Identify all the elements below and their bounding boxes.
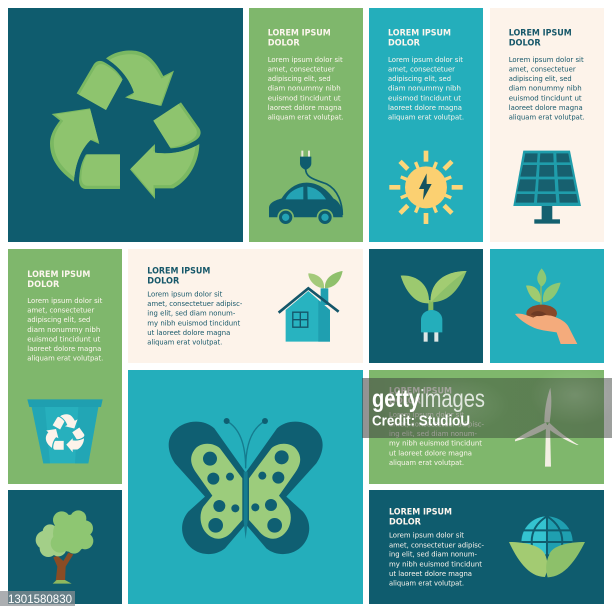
text block (147, 289, 243, 347)
heading: LOREM IPSUM (147, 266, 210, 276)
panel: plug with leaves (369, 249, 483, 363)
text block: amet, consectetuer adipisc- (389, 420, 484, 429)
text block: diam nonummy nibh (27, 325, 100, 334)
heading: LOREM IPSUM (27, 270, 90, 280)
text block: euismod tincidunt ut (509, 93, 582, 102)
panel: recycling bin (8, 249, 122, 484)
icon: electric car (269, 151, 343, 226)
panel: wind turbine (369, 370, 604, 484)
text block: Lorem ipsum dolor sit (147, 289, 222, 298)
text block: adipiscing elit, sed (27, 315, 90, 324)
text block: aliquam erat volutpat. (27, 354, 103, 363)
heading: LOREM IPSUM (268, 29, 331, 39)
heading (509, 29, 572, 49)
icon: tree (36, 510, 93, 584)
text block: laoreet dolore magna (509, 103, 583, 112)
icon: recycling bin (27, 399, 103, 463)
heading: DOLOR (389, 397, 421, 407)
heading (388, 29, 451, 49)
heading: DOLOR (389, 517, 421, 527)
text block: diam nonummy nibh (388, 84, 461, 93)
heading: LOREM IPSUM (388, 29, 451, 39)
text block: laoreet dolore magna (388, 103, 462, 112)
text block: aliquam erat volutpat. (389, 579, 464, 588)
icon: wind turbine (515, 388, 579, 467)
text block (268, 55, 344, 121)
icon: solar panel (513, 151, 581, 224)
text block (509, 55, 585, 121)
text block: ing elit, sed diam nonum- (147, 309, 236, 318)
text block (27, 296, 103, 363)
panel: eco house (128, 249, 363, 363)
text block: adipiscing elit, sed (509, 74, 572, 83)
panel: globe with leaves (369, 490, 604, 604)
text block: euismod tincidunt ut (268, 93, 341, 102)
icon: globe held by leaves (509, 516, 585, 577)
text block: euismod tincidunt ut (388, 93, 461, 102)
panel: solar panel (490, 8, 604, 242)
text block: Lorem ipsum dolor sit (27, 296, 102, 305)
text block: my nibh euismod tincidunt (389, 559, 482, 568)
panel: hand holding seedling (490, 249, 604, 363)
text block: Lorem ipsum dolor sit (388, 55, 463, 64)
heading: DOLOR (268, 39, 300, 49)
text block (388, 55, 464, 121)
text block: my nibh euismod tincidunt (147, 318, 240, 327)
text block: diam nonummy nibh (268, 84, 341, 93)
heading (27, 270, 90, 290)
heading (147, 266, 210, 286)
text block: aliquam erat volutpat. (268, 112, 344, 121)
image id tag: 1301580830 (8, 594, 72, 606)
text block: adipiscing elit, sed (388, 74, 451, 83)
text block: aliquam erat volutpat. (389, 458, 464, 467)
panel: recycling symbol (8, 8, 243, 242)
text block: ut laoreet dolore magna (389, 569, 472, 578)
icon: house with leaves (279, 271, 343, 342)
text block: amet, consectetuer adipisc- (389, 540, 484, 549)
text block: amet, consectetuer (388, 65, 455, 74)
watermark band (362, 365, 612, 438)
heading: LOREM IPSUM (509, 29, 572, 39)
text block: aliquam erat volutpat. (388, 112, 464, 121)
panel: electric car (249, 8, 363, 242)
heading: DOLOR (27, 280, 60, 290)
icon: hand with seedling (515, 268, 577, 344)
heading: DOLOR (388, 39, 420, 49)
icon: sun with lightning bolt (389, 151, 463, 224)
text block: euismod tincidunt ut (27, 334, 100, 343)
text block: ing elit, sed diam nonum- (389, 550, 477, 559)
text block: adipiscing elit, sed (268, 74, 331, 83)
panel: tree (8, 490, 122, 604)
text block: ut laoreet dolore magna (389, 448, 472, 457)
text block (389, 410, 484, 467)
text block: laoreet dolore magna (27, 344, 101, 353)
text block: diam nonummy nibh (509, 84, 582, 93)
image id tag (0, 591, 75, 606)
panel: butterfly (128, 370, 363, 604)
text block: aliquam erat volutpat. (509, 112, 585, 121)
heading: DOLOR (509, 39, 541, 49)
text block: amet, consectetuer (268, 65, 335, 74)
text block: aliquam erat volutpat. (147, 338, 222, 347)
text block: amet, consectetuer adipisc- (147, 299, 243, 308)
heading (389, 387, 452, 407)
text block: Lorem ipsum dolor sit (509, 55, 584, 64)
icon: butterfly (169, 418, 323, 554)
watermark logo: gettyimages (372, 385, 485, 413)
text block: laoreet dolore magna (268, 103, 342, 112)
text block: Lorem ipsum dolor sit (389, 410, 464, 419)
text block (389, 531, 484, 588)
heading (389, 507, 452, 527)
icon: recycling arrows (50, 51, 201, 199)
text block: ing elit, sed diam nonum- (389, 429, 477, 438)
heading (268, 29, 331, 49)
text block: amet, consectetuer (509, 65, 576, 74)
text block: Lorem ipsum dolor sit (389, 531, 464, 540)
text block: amet, consectetuer (27, 306, 94, 315)
heading: LOREM IPSUM (389, 507, 452, 517)
heading: DOLOR (147, 276, 180, 286)
panel: solar energy (369, 8, 483, 242)
watermark credit: Credit: StudioU (372, 414, 470, 430)
text block: ut laoreet dolore magna (147, 328, 230, 337)
heading: LOREM IPSUM (389, 387, 452, 397)
icon: plant plug (401, 271, 467, 342)
text block: Lorem ipsum dolor sit (268, 55, 343, 64)
text block: my nibh euismod tincidunt (389, 439, 482, 448)
